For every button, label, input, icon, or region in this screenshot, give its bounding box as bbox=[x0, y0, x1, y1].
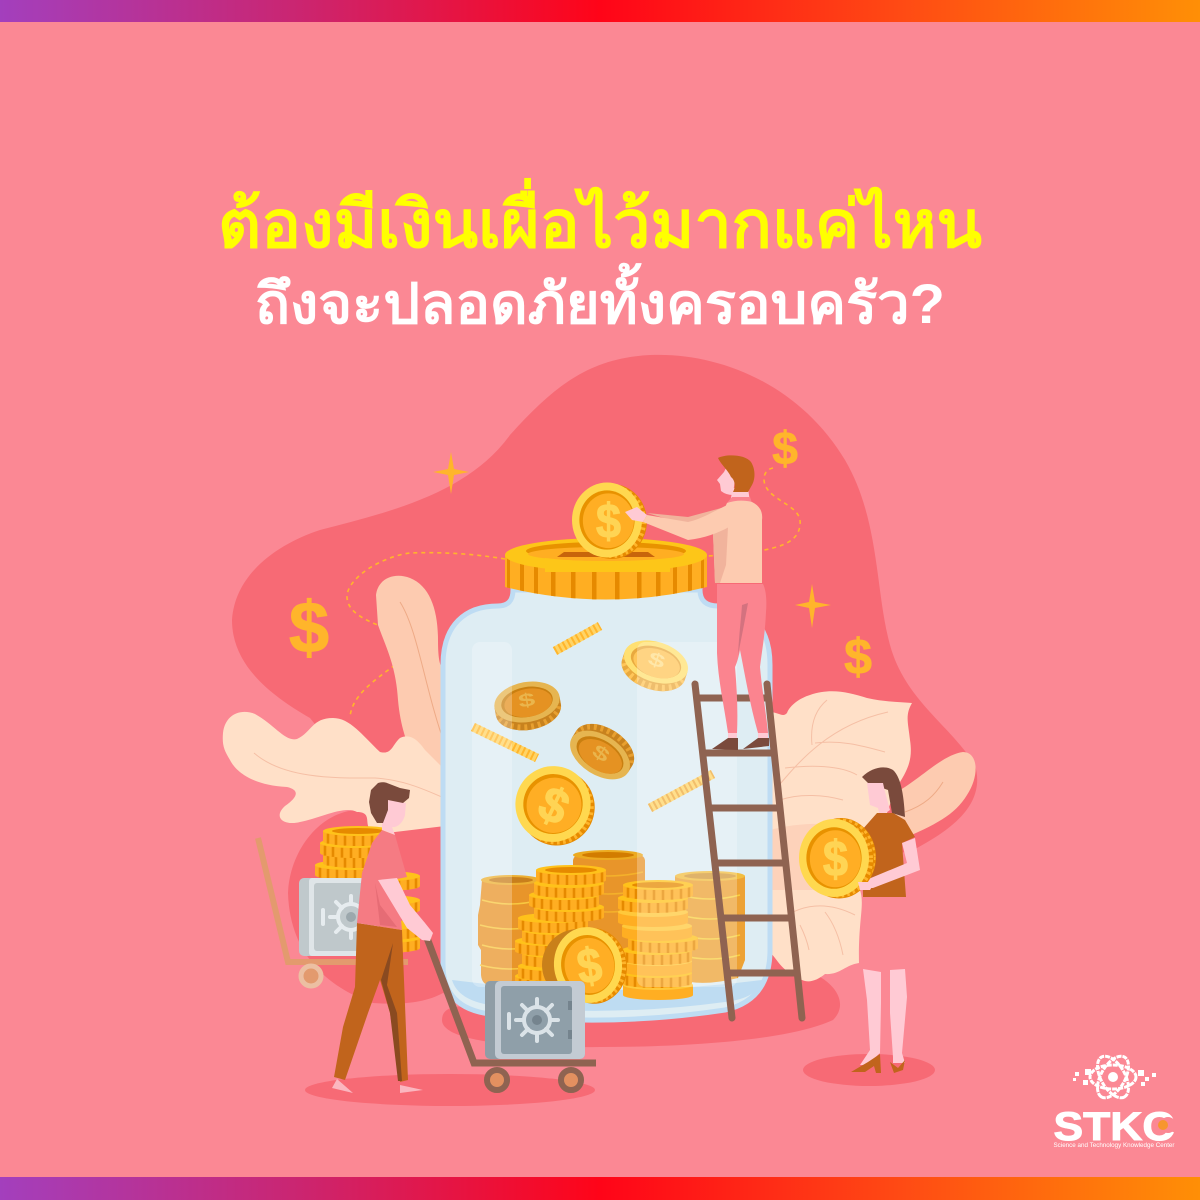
falling coin 1: $ bbox=[517, 689, 537, 712]
face bbox=[867, 783, 890, 817]
torso bbox=[713, 501, 762, 583]
lid coin bbox=[572, 482, 647, 559]
background blob bbox=[232, 355, 977, 950]
neck bbox=[730, 488, 750, 502]
faded cart bbox=[258, 838, 408, 962]
wheel bbox=[561, 1070, 581, 1090]
logo bbox=[1054, 1051, 1176, 1149]
illustration bbox=[223, 355, 977, 1106]
face bbox=[717, 466, 735, 495]
glass highlight right bbox=[637, 642, 737, 987]
top gradient bar bbox=[0, 0, 1200, 22]
jar floor bbox=[452, 980, 762, 1011]
falling coin 1 bbox=[494, 682, 562, 730]
right coin stack bbox=[675, 871, 745, 983]
trouser fold bbox=[738, 603, 748, 655]
leaf: cream right bbox=[770, 691, 912, 981]
falling coin 2: $ bbox=[645, 648, 668, 673]
walking man bbox=[332, 782, 433, 1093]
logo wordmark: STKC bbox=[1054, 1105, 1174, 1149]
back leg shade bbox=[381, 943, 402, 1081]
dashed money trails bbox=[347, 468, 800, 717]
dollar sign top: $ bbox=[772, 422, 798, 474]
shirt shade bbox=[375, 883, 397, 927]
ground shadow: walker bbox=[305, 1074, 595, 1106]
cart frame bbox=[427, 938, 596, 1063]
left coin stack bbox=[478, 875, 541, 985]
big coin bbox=[799, 819, 874, 899]
feet bbox=[332, 1079, 423, 1093]
shirt bbox=[862, 813, 915, 897]
faded wheel bbox=[301, 966, 321, 986]
blob floor under jar bbox=[442, 950, 840, 1047]
front coin stack right bbox=[618, 880, 698, 1000]
hand bbox=[625, 507, 647, 522]
ladder man bbox=[625, 455, 769, 750]
hair bbox=[369, 782, 410, 823]
leaf: peach right bbox=[890, 752, 976, 840]
pants bbox=[334, 923, 408, 1082]
shoes bbox=[851, 1054, 905, 1073]
falling coin 3: $ bbox=[588, 740, 614, 767]
sparkle right bbox=[795, 584, 831, 628]
sparkle left bbox=[433, 452, 469, 494]
shoes bbox=[712, 738, 769, 750]
hair bbox=[718, 455, 754, 492]
hair bbox=[862, 767, 905, 817]
back coin stack bbox=[573, 850, 645, 975]
shirt bbox=[357, 830, 407, 930]
falling coin 4 bbox=[502, 754, 608, 858]
collar bbox=[727, 497, 752, 503]
falling coin 2 bbox=[622, 640, 688, 692]
bar coin 3 bbox=[650, 774, 713, 808]
logo tagline: Science and Technology Knowledge Center bbox=[1054, 1143, 1175, 1149]
patch below coin bbox=[545, 558, 670, 572]
glass highlight left bbox=[472, 642, 512, 987]
wheel bbox=[487, 1070, 507, 1090]
bar coin 1 bbox=[555, 626, 600, 651]
arm bbox=[858, 838, 920, 888]
far arm bbox=[398, 880, 425, 923]
blob lower left bbox=[288, 810, 520, 1007]
fingers bbox=[858, 882, 875, 890]
dollar sign right: $ bbox=[844, 629, 872, 685]
logo dot bbox=[1158, 1120, 1168, 1130]
bar coin 2 bbox=[473, 727, 537, 758]
glass jar bbox=[443, 482, 770, 1020]
safe bbox=[485, 981, 585, 1059]
jar body bbox=[443, 590, 770, 1020]
big coin edge bbox=[806, 818, 876, 896]
title bbox=[218, 177, 982, 335]
neck and face bbox=[382, 800, 406, 835]
arm bbox=[378, 878, 433, 941]
title line 1: ต้องมีเงินเผื่อไว้มากแค่ไหน bbox=[218, 177, 982, 261]
title line 2: ถึงจะปลอดภัยทั้งครอบครัว? bbox=[255, 263, 945, 335]
jar lid bbox=[505, 538, 707, 601]
coin stacks behind bbox=[315, 826, 420, 953]
ankles bbox=[728, 733, 768, 740]
big coin in stack bbox=[542, 922, 632, 1009]
safe behind walker bbox=[258, 826, 420, 986]
falling coin 3 bbox=[570, 724, 634, 780]
dollar sign left: $ bbox=[289, 588, 329, 668]
woman with coin bbox=[799, 767, 920, 1073]
ground shadow: woman bbox=[803, 1054, 935, 1086]
leaf: cream left bbox=[223, 712, 445, 833]
cart with safe bbox=[427, 938, 596, 1090]
legs bbox=[860, 969, 907, 1065]
atom icon bbox=[1090, 1051, 1136, 1103]
logo dot cutout bbox=[1160, 1117, 1176, 1133]
arm shadow bbox=[647, 507, 728, 525]
logo pixels bbox=[1073, 1069, 1156, 1086]
faded safe bbox=[299, 878, 379, 956]
legs bbox=[717, 584, 768, 733]
bottom gradient bar bbox=[0, 1177, 1200, 1200]
torso shadow bbox=[713, 527, 728, 583]
leaf: peach upright left bbox=[376, 576, 445, 800]
front coin stack centre bbox=[515, 865, 606, 991]
ladder bbox=[695, 684, 802, 1018]
arm bbox=[643, 504, 730, 540]
